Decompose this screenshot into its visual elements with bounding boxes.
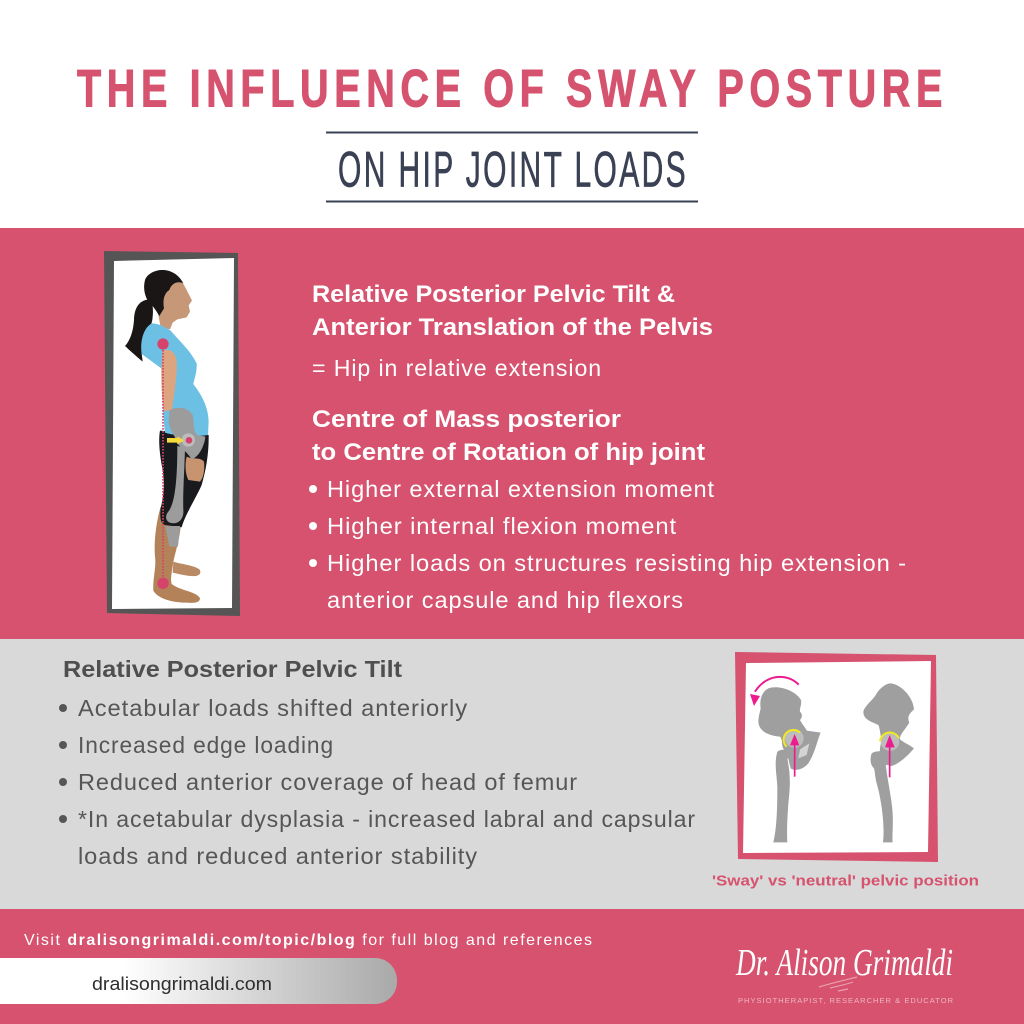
list: acetabular loads: loads and reduced anterior stability [78, 843, 478, 869]
icon: sway pelvis and femur [750, 677, 821, 842]
list: acetabular loads: *In acetabular dysplasia - increased labral and capsular [78, 806, 696, 832]
panel: header background [0, 0, 1024, 228]
figure: standing woman with sway posture [104, 251, 240, 616]
website pill [0, 958, 397, 1004]
list: acetabular loads [59, 695, 696, 869]
icon: neutral pelvis and femur [863, 683, 914, 842]
heading: relative posterior pelvic tilt: Relative Posterior Pelvic Tilt & [312, 281, 675, 308]
panel: sway posture biomechanics [0, 228, 1024, 639]
list: moments and loads: Higher external extension moment [327, 476, 715, 502]
heading: relative posterior pelvic tilt: Relative Posterior Pelvic Tilt [63, 656, 402, 682]
figure: sway vs neutral pelvis [735, 652, 938, 862]
list: acetabular loads: Reduced anterior coverage of head of femur [78, 769, 578, 795]
list: acetabular loads: Acetabular loads shifted anteriorly [78, 695, 468, 721]
list: moments and loads [309, 476, 907, 613]
list: moments and loads: Higher loads on structures resisting hip extension - [327, 550, 907, 576]
heading: centre of rotation: to Centre of Rotation of hip joint [312, 439, 705, 466]
logo [735, 942, 954, 1005]
list: acetabular loads: Increased edge loading [78, 732, 334, 758]
heading: centre of mass: Centre of Mass posterior [312, 406, 621, 433]
list: moments and loads: Higher internal flexion moment [327, 513, 677, 539]
subtitle with rules: ON HIP JOINT LOADS [338, 142, 688, 198]
panel: footer [0, 909, 1024, 1024]
logo: PHYSIOTHERAPIST, RESEARCHER & EDUCATOR [738, 996, 954, 1005]
text: hip in relative extension: = Hip in relative extension [312, 355, 602, 381]
text: visit blog: Visit dralisongrimaldi.com/topic/blog for full blog and references [24, 932, 592, 949]
heading: anterior translation: Anterior Translation of the Pelvis [312, 314, 713, 341]
panel: acetabular effects [0, 639, 1024, 909]
website pill: dralisongrimaldi.com [92, 974, 272, 994]
list: moments and loads: anterior capsule and hip flexors [327, 587, 684, 613]
caption: 'Sway' vs 'neutral' pelvic position [712, 872, 979, 890]
